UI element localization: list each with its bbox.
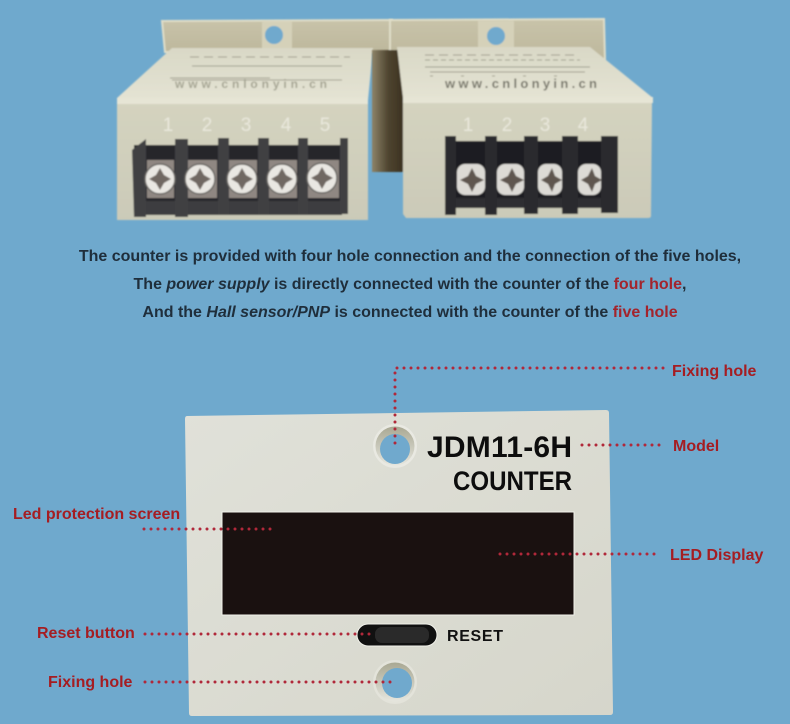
device: five-hole counter: www.cnlonyin.cn <box>174 77 327 91</box>
line 1: The counter is provided with four hole connection and the connection of the five holes, <box>79 248 741 265</box>
counter front panel <box>185 410 613 716</box>
label: reset button: Reset button <box>37 625 135 642</box>
label: fixing hole bottom: Fixing hole <box>48 674 132 691</box>
reset text: RESET <box>447 628 503 645</box>
label: fixing hole top: Fixing hole <box>672 363 756 380</box>
terminal numbers: 4 <box>281 115 292 136</box>
terminal numbers <box>463 115 589 136</box>
terminal numbers: 3 <box>241 115 251 136</box>
line 3: And the Hall sensor/PNP is connected with the counter of the five hole <box>142 304 678 321</box>
label: model: Model <box>673 438 719 455</box>
model text: JDM11-6H <box>427 431 572 464</box>
reset button <box>357 624 437 646</box>
terminal numbers: 5 <box>320 115 330 136</box>
device: four-hole counter: www.cnlonyin.cn <box>444 76 597 91</box>
front face <box>403 103 652 218</box>
counter text: COUNTER <box>453 466 572 496</box>
leader: reset button <box>145 632 375 636</box>
top face <box>397 47 653 98</box>
terminal numbers: 1 <box>463 115 473 136</box>
terminal numbers: 1 <box>163 115 173 136</box>
screws <box>457 164 601 195</box>
back mounting plate <box>162 20 392 52</box>
terminal numbers <box>163 115 330 136</box>
leader: model <box>582 444 660 446</box>
back mounting plate <box>390 19 605 60</box>
terminal block <box>132 138 348 217</box>
device: four-hole counter <box>372 19 653 218</box>
terminal numbers: 4 <box>578 115 589 136</box>
bottom fixing hole <box>373 660 417 704</box>
LED screen <box>222 512 574 615</box>
label: LED protection screen: Led protection screen <box>13 506 180 523</box>
leader: LED display <box>500 552 660 556</box>
top face <box>117 48 373 100</box>
terminal numbers: 2 <box>502 115 512 136</box>
leader: top fixing hole <box>395 368 663 446</box>
screws <box>145 160 339 198</box>
front face <box>117 103 368 220</box>
leader: bottom fixing hole <box>145 680 396 684</box>
leader: LED protection screen <box>144 528 272 530</box>
line 2: The power supply is directly connected with the counter of the four hole, <box>134 276 686 293</box>
top fixing hole <box>373 424 417 468</box>
terminal block <box>445 136 618 215</box>
device: five-hole counter <box>117 20 392 220</box>
terminal numbers: 2 <box>202 115 212 136</box>
terminal numbers: 3 <box>540 115 550 136</box>
dotted leader lines <box>144 368 663 682</box>
gap between the units <box>372 50 404 172</box>
description text <box>79 248 741 321</box>
label: LED display: LED Display <box>670 547 763 564</box>
